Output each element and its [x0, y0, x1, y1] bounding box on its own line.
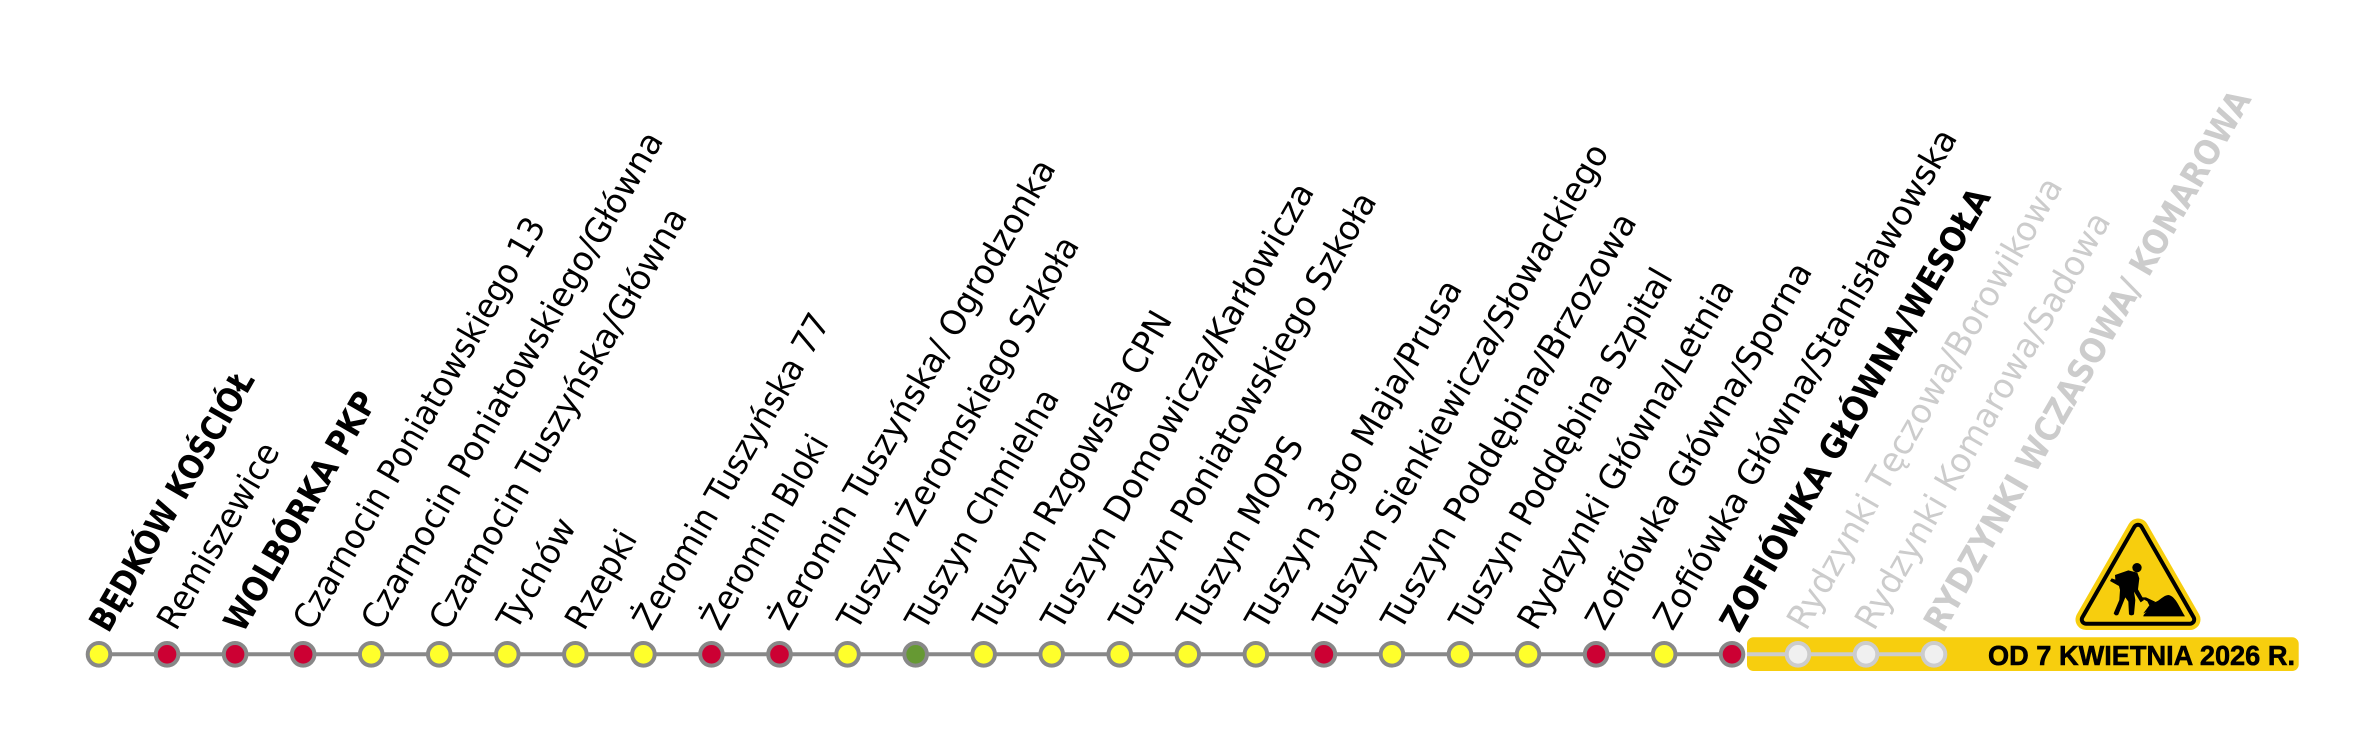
station labels: Rydzynki Tęczowa/Borowikowa	[1779, 170, 2071, 636]
station labels: Rydzynki Główna/Letnia	[1510, 273, 1743, 636]
station labels: Remiszewice	[149, 436, 288, 636]
station labels: Tuszyn Poddębina/Brzozowa	[1373, 206, 1645, 637]
station labels: Rydzynki Komarowa/Sadowa	[1847, 205, 2119, 636]
station labels: BĘDKÓW KOŚCIÓŁ	[81, 363, 263, 638]
station labels: ZOFIÓWKA GŁÓWNA/WESOŁA	[1711, 180, 2000, 638]
station labels: Tuszyn Sienkiewicza/Słowackiego	[1305, 137, 1617, 637]
station labels	[81, 83, 2260, 638]
station labels: Zofiówka Główna/Stanisławowska	[1646, 122, 1966, 636]
station labels: RYDZYNKI WCZASOWA/ KOMAROWA	[1916, 83, 2260, 638]
route line active	[99, 652, 1732, 656]
station labels: Tuszyn Domowicza/Karłowicza	[1033, 176, 1323, 637]
station labels: Tuszyn Chmielna	[897, 382, 1068, 637]
station labels: Żeromin Tuszyńska/ Ogrodzonka	[762, 152, 1064, 636]
date label: OD 7 KWIETNIA 2026 R.	[1988, 640, 2295, 671]
station labels: Tuszyn Rzgowska CPN	[965, 304, 1181, 637]
station labels: WOLBÓRKA PKP	[215, 384, 386, 638]
station labels: Czarnocin Tuszyńska/Główna	[421, 201, 696, 636]
icon: road works warning sign	[2086, 529, 2190, 620]
station labels: Żeromin Tuszyńska 77	[625, 306, 839, 636]
station labels: Tuszyn Żeromskiego Szkoła	[829, 229, 1088, 637]
station labels: Tuszyn Poddębina Szpital	[1441, 261, 1681, 637]
station labels: Czarnocin Poniatowskiego 13	[285, 210, 554, 636]
station labels: Żeromin Bloki	[694, 428, 837, 636]
route line planned	[1747, 652, 1934, 656]
station labels: Tuszyn Poniatowskiego Szkoła	[1101, 185, 1385, 637]
station labels: Rzepki	[557, 523, 646, 636]
station markers	[88, 643, 1945, 666]
station labels: Zofiówka Główna/Sporna	[1578, 255, 1821, 636]
station labels: Czarnocin Poniatowskiego/Główna	[353, 125, 672, 636]
station labels: Tuszyn 3-go Maja/Prusa	[1237, 273, 1471, 637]
station labels: Tychów	[489, 511, 585, 637]
station labels: Tuszyn MOPS	[1169, 429, 1312, 637]
yellow date band	[1747, 637, 2299, 671]
